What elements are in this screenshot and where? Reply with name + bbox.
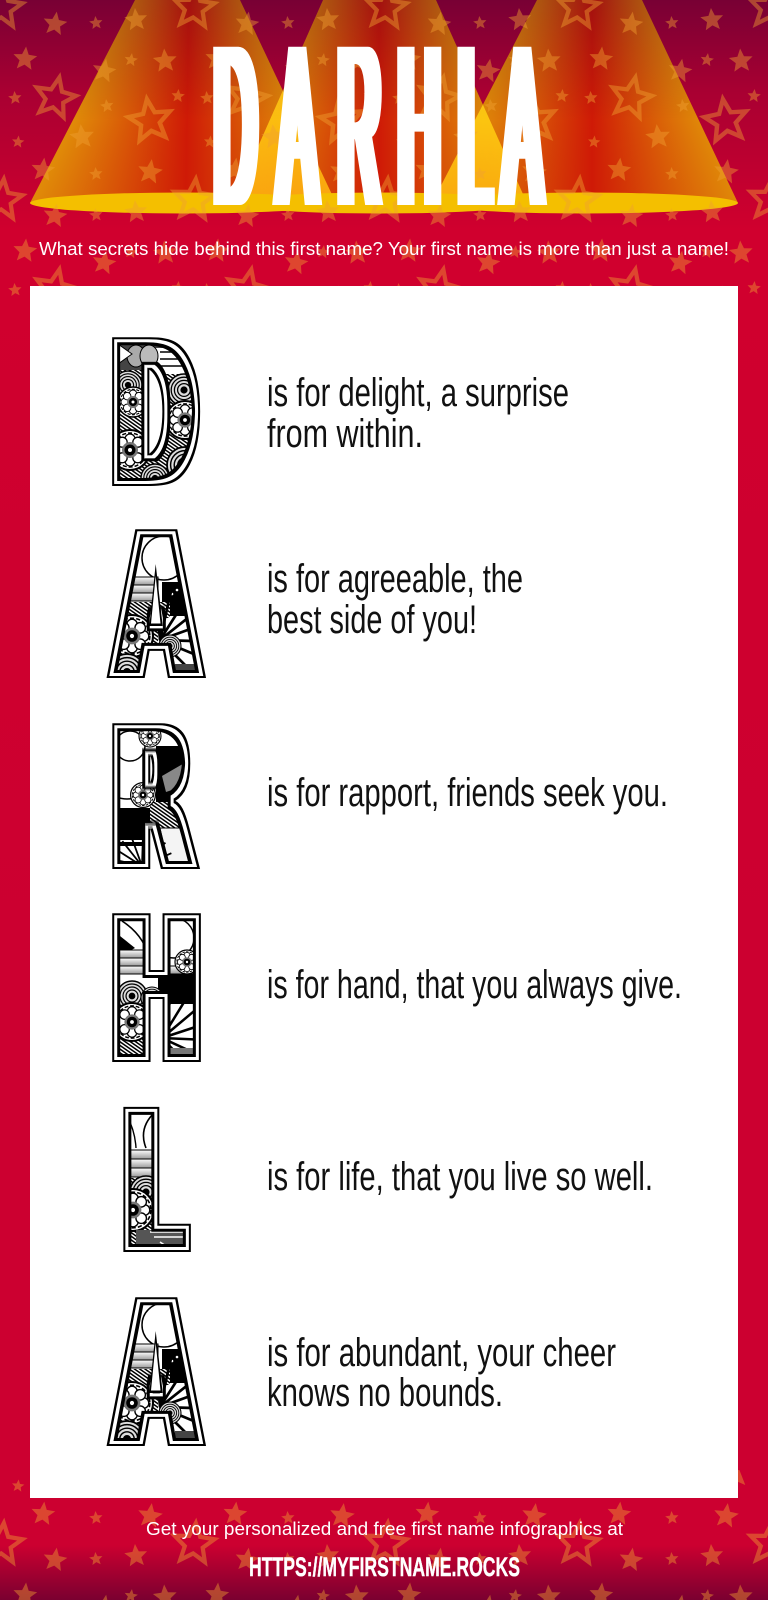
counter slit <box>149 564 163 626</box>
text D: from within. <box>267 412 423 456</box>
footer invitation: Get your personalized and free first name infographics at <box>146 1518 623 1539</box>
subtitle: What secrets hide behind this first name? Your first name is more than just a name! <box>39 238 729 259</box>
text A second: knows no bounds. <box>267 1371 503 1415</box>
counter slit second <box>149 1331 163 1393</box>
spotlight right <box>441 0 738 203</box>
spotlights <box>30 0 738 203</box>
text D: is for delight, a surprise <box>267 371 569 415</box>
letter R <box>112 716 200 886</box>
letter D <box>112 330 200 500</box>
letter L <box>123 1100 191 1270</box>
text A second <box>267 1331 616 1415</box>
text A <box>267 557 523 642</box>
spotlight left <box>30 0 332 203</box>
text D <box>267 371 569 456</box>
text A: is for agreeable, the <box>267 557 523 601</box>
text A: best side of you! <box>267 598 477 642</box>
spotlight centre <box>250 0 523 195</box>
text A second: is for abundant, your cheer <box>267 1331 616 1375</box>
letter A <box>106 522 206 692</box>
footer url: HTTPS://MYFIRSTNAME.ROCKS <box>249 1552 520 1582</box>
letter A second <box>106 1289 206 1459</box>
letter H <box>111 906 202 1076</box>
spotlight base ellipses <box>30 192 738 214</box>
panel: white card <box>30 286 738 1498</box>
